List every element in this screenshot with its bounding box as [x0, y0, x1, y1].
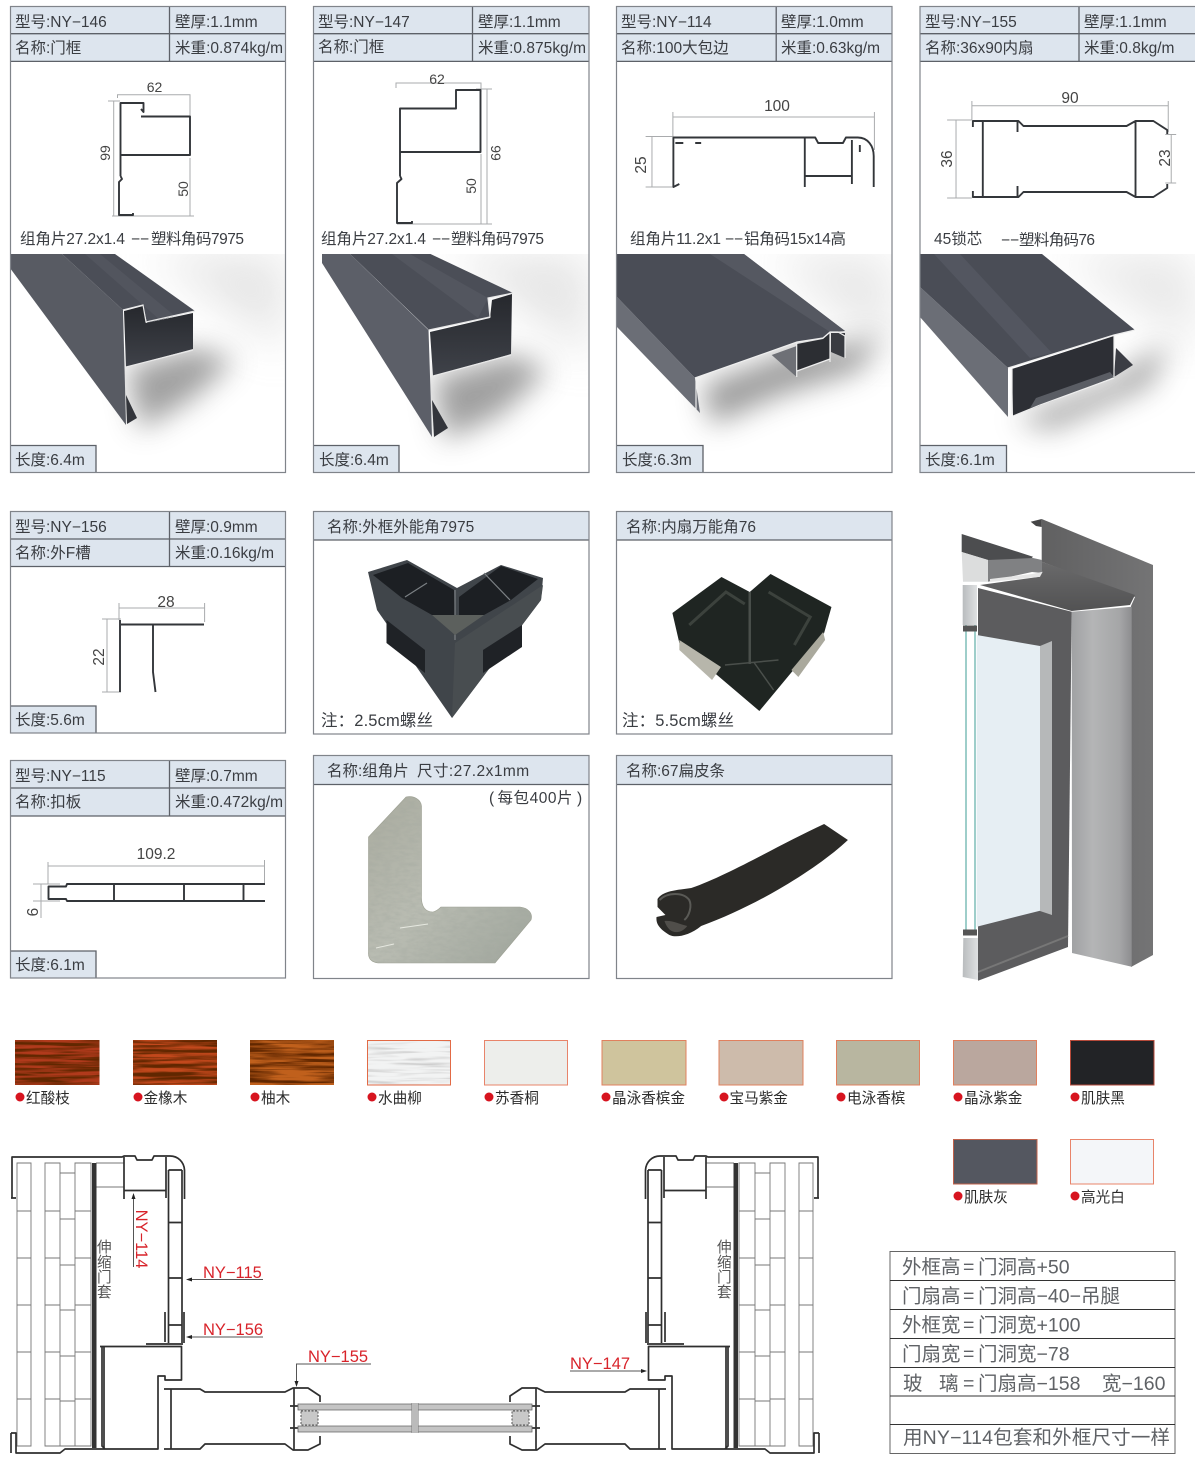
spec header NY-155: 米重:0.8kg/m [1084, 39, 1174, 57]
spec header NY-115 [10, 760, 286, 816]
panel border [314, 6, 589, 472]
photo NY-147 [322, 254, 589, 440]
assembly note NY-155 [934, 230, 1095, 249]
formula 外框宽: 门洞宽+100 [978, 1314, 1081, 1336]
photo: rubber strip [656, 824, 848, 936]
swatch 金橡木 [133, 1040, 217, 1107]
assembly note NY-155: 塑料角码76 [1019, 231, 1095, 249]
panel: 67扁皮条 [616, 756, 892, 978]
profile drawing NY-147: 99 [488, 145, 504, 161]
panel border [616, 6, 892, 472]
spec header NY-147: 型号:NY−147 [318, 13, 410, 31]
formula 门扇宽: = [963, 1344, 974, 1366]
formula 玻璃: 璃 [939, 1373, 959, 1395]
spec header NY-155: 壁厚:1.1mm [1084, 13, 1167, 31]
assembly note NY-114 [630, 230, 846, 248]
swatch 水曲柳: 水曲柳 [378, 1090, 422, 1107]
swatch 肌肤黑 [1070, 1040, 1154, 1107]
profile drawing NY-114: 25 [633, 156, 650, 174]
spec header NY-155: 型号:NY−155 [925, 13, 1017, 31]
formula 外框高: = [963, 1256, 974, 1278]
spec header NY-114: 型号:NY−114 [621, 13, 712, 31]
panel border [314, 512, 589, 734]
profile drawing NY-155: 90 [1061, 90, 1079, 107]
swatch 红酸枝 [15, 1040, 100, 1107]
panel border [10, 760, 286, 978]
formula 外框高: 门洞高+50 [978, 1256, 1070, 1278]
section highlight [990, 572, 1043, 582]
profile drawing NY-115 [23, 846, 265, 918]
swatch 苏香桐 [484, 1040, 568, 1107]
callout NY-114: NY−114 [132, 1210, 150, 1268]
spec header NY-114: 壁厚:1.0mm [781, 13, 864, 31]
label: 伸缩门套 right [717, 1239, 732, 1301]
panel: NY-155 [920, 6, 1195, 472]
top silver block [962, 552, 988, 582]
formula 外框宽: 外框宽 [902, 1314, 961, 1336]
photo: corner plate [365, 795, 535, 965]
assembly note NY-146 [20, 230, 244, 248]
photo: plastic outer corner [368, 560, 543, 718]
silver left block [963, 585, 977, 625]
top rail dark [962, 534, 1033, 560]
panel border [920, 6, 1195, 472]
header [314, 756, 589, 784]
spec header NY-114 [616, 6, 892, 62]
profile drawing NY-114 [633, 98, 874, 187]
swatch 肌肤灰: 肌肤灰 [964, 1189, 1008, 1206]
profile drawing NY-147 [396, 71, 504, 224]
profile drawing NY-115: 9 [23, 908, 40, 916]
packing note: ) [577, 790, 582, 807]
assembly note NY-155: 45锁芯 [934, 230, 982, 248]
profile drawing NY-147: 50 [463, 178, 479, 194]
spec header NY-115: 型号:NY−115 [15, 767, 106, 785]
header [616, 512, 892, 540]
panel: NY-147 [314, 6, 589, 472]
header: 名称:外框外能角7975 [327, 518, 474, 536]
spec header NY-155 [920, 6, 1195, 62]
swatch 柚木 [250, 1040, 334, 1107]
length tab NY-147 [314, 446, 399, 472]
spec header NY-146 [10, 6, 286, 62]
profile drawing NY-115: 109.2 [137, 846, 175, 863]
formula 门扇高: = [963, 1286, 974, 1308]
formula 玻璃: = [963, 1373, 974, 1395]
spec header NY-156: 型号:NY−156 [15, 518, 107, 536]
swatch 晶泳紫金: 晶泳紫金 [964, 1090, 1023, 1107]
formula 门扇高: 门洞高−40−吊腿 [978, 1286, 1120, 1308]
formula 玻璃: 宽−160 [1102, 1373, 1166, 1395]
swatch 高光白 [1070, 1140, 1154, 1206]
length tab NY-146 [10, 446, 96, 472]
assembly note NY-155: −− [1001, 232, 1019, 249]
swatch 金橡木: 金橡木 [144, 1090, 188, 1107]
length tab NY-114 [616, 446, 703, 472]
assembly note NY-147: 组角片27.2x1.4 [321, 230, 426, 248]
header: 名称:内扇万能角76 [626, 518, 756, 536]
panel: NY-146 [10, 6, 286, 472]
glazing spacers [963, 628, 977, 932]
assembly note NY-146: 塑料角码7975 [151, 230, 244, 248]
profile drawing NY-147: 62 [429, 71, 445, 87]
assembly note NY-114: 组角片11.2x1 [630, 230, 721, 248]
swatch 水曲柳 [368, 1040, 450, 1107]
panel: 内扇万能角76 [616, 512, 892, 734]
swatch 晶泳香槟金: 晶泳香槟金 [612, 1090, 685, 1107]
label: 伸缩门套 right: 门 [717, 1269, 732, 1286]
label: 伸缩门套 left: 门 [97, 1269, 112, 1286]
callout NY-115: NY−115 [203, 1264, 262, 1282]
panel: NY-156 [10, 512, 286, 733]
spec header NY-147: 米重:0.875kg/m [478, 39, 586, 57]
bottom silver block [963, 938, 978, 980]
profile drawing NY-156: 28 [157, 594, 175, 611]
label: 伸缩门套 left: 伸 [97, 1239, 112, 1256]
profile drawing NY-156: 22 [91, 648, 108, 666]
spec header NY-146: 米重:0.874kg/m [175, 39, 283, 57]
spec header NY-147: 壁厚:1.1mm [478, 13, 561, 31]
callout NY-155: NY−155 [308, 1348, 368, 1366]
soffit [980, 562, 1135, 611]
spec header NY-115: 米重:0.472kg/m [175, 793, 283, 811]
profile drawing NY-146: 62 [147, 79, 162, 95]
formula 外框宽: = [963, 1314, 974, 1336]
label: 伸缩门套 right: 套 [717, 1284, 732, 1301]
swatch 电泳香槟: 电泳香槟 [847, 1090, 906, 1107]
length tab NY-155 [920, 446, 1006, 472]
assembly note NY-114: 铝角码15x14高 [744, 230, 846, 248]
length tab NY-115: 长度:6.1m [15, 956, 85, 974]
formula 玻璃: 门扇高−158 [978, 1373, 1080, 1395]
inner reveal [1040, 641, 1052, 915]
callout NY-156: NY−156 [203, 1321, 263, 1339]
jamb reveal [1072, 607, 1132, 967]
glass panes [966, 625, 975, 935]
formula note: 用NY−114包套和外框尺寸一样 [903, 1427, 1170, 1449]
callout NY-147: NY−147 [570, 1355, 630, 1373]
profile drawing NY-155: 23 [1157, 149, 1174, 167]
header: 名称:67扁皮条 [626, 762, 725, 780]
photo NY-146 [10, 254, 285, 430]
length tab NY-146: 长度:6.4m [15, 451, 85, 469]
packing note: 每包400片 [498, 789, 572, 807]
spec header NY-156 [10, 512, 286, 566]
channel [988, 558, 1042, 582]
header: 尺寸:27.2x1mm [417, 762, 530, 780]
label: 伸缩门套 right: 缩 [717, 1254, 732, 1271]
door leaf frame [978, 588, 1072, 981]
panel border [616, 756, 892, 978]
cross-section left half [11, 1156, 416, 1453]
header: 名称:组角片 [327, 763, 409, 780]
swatch 晶泳紫金 [954, 1040, 1036, 1107]
header [314, 512, 589, 540]
spec header NY-146: 壁厚:1.1mm [175, 13, 258, 31]
swatch 宝马紫金 [719, 1040, 803, 1107]
spec header NY-147: 名称:门框 [318, 38, 384, 56]
spec header NY-114: 米重:0.63kg/m [781, 39, 880, 57]
formula 门扇宽: 门洞宽−78 [978, 1344, 1070, 1366]
length tab NY-156: 长度:5.6m [15, 711, 85, 729]
profile drawing NY-146: 50 [175, 181, 191, 197]
callout NY-155 [294, 1348, 371, 1387]
window frame render [962, 519, 1153, 981]
photo NY-155 [920, 254, 1195, 430]
swatch 晶泳香槟金 [602, 1040, 686, 1107]
assembly note NY-147 [321, 230, 544, 248]
spec header NY-115: 壁厚:0.7mm [175, 767, 258, 785]
assembly note NY-147: 塑料角码7975 [451, 230, 544, 248]
swatch 红酸枝: 红酸枝 [26, 1090, 70, 1107]
outer wall [1042, 519, 1153, 967]
label: 伸缩门套 left: 套 [97, 1284, 112, 1301]
panel border [10, 6, 286, 472]
profile drawing NY-114: 100 [764, 98, 790, 115]
cross-section right half [414, 1156, 819, 1453]
spec header NY-156: 壁厚:0.9mm [175, 518, 258, 536]
formula 门扇高: 门扇高 [902, 1286, 961, 1308]
note: 注：2.5cm螺丝 [321, 711, 433, 730]
length tab NY-156 [10, 706, 96, 733]
formula 外框高: 外框高 [902, 1256, 961, 1278]
length tab NY-114: 长度:6.3m [622, 451, 692, 469]
packing note: ( [489, 790, 495, 807]
photo NY-114 [617, 254, 892, 425]
label: 伸缩门套 left [97, 1239, 112, 1301]
assembly note NY-147: −− [432, 231, 450, 248]
formula 门扇宽: 门扇宽 [902, 1344, 961, 1366]
panel border [616, 512, 892, 734]
colour swatches [15, 1040, 1154, 1206]
swatch 电泳香槟 [836, 1040, 920, 1107]
spec header NY-156: 名称:外F槽 [15, 544, 91, 562]
profile drawing NY-155 [939, 90, 1176, 198]
frame lower highlight [978, 936, 1068, 972]
swatch 高光白: 高光白 [1081, 1189, 1125, 1206]
swatch 肌肤灰 [954, 1140, 1037, 1206]
length tab NY-155: 长度:6.1m [925, 451, 995, 469]
photo: plastic inner corner [672, 574, 831, 711]
panel: 组角片 [314, 756, 589, 978]
length tab NY-115 [10, 951, 96, 978]
spec header NY-147 [314, 6, 589, 62]
label: 伸缩门套 right: 伸 [717, 1239, 732, 1256]
glass [977, 635, 1040, 927]
assembly note NY-114: −− [725, 231, 743, 248]
panel border [10, 512, 286, 733]
header [616, 756, 892, 784]
panel: 外框外能角7975 [314, 512, 589, 734]
panel: NY-115 [10, 760, 286, 978]
spec header NY-146: 型号:NY−146 [15, 13, 107, 31]
swatch 柚木: 柚木 [261, 1090, 291, 1107]
formula 玻璃: 玻 [903, 1373, 923, 1395]
note: 注：5.5cm螺丝 [622, 711, 734, 730]
profile drawing NY-155: 36 [939, 150, 956, 168]
panel: NY-114 [616, 6, 892, 472]
assembly note NY-146: −− [131, 231, 149, 248]
swatch 肌肤黑: 肌肤黑 [1081, 1090, 1125, 1107]
swatch 苏香桐: 苏香桐 [495, 1090, 539, 1107]
assembly note NY-146: 组角片27.2x1.4 [20, 230, 125, 248]
spec header NY-115: 名称:扣板 [15, 793, 81, 811]
swatch 宝马紫金: 宝马紫金 [730, 1090, 788, 1107]
label: 伸缩门套 left: 缩 [97, 1254, 112, 1271]
profile drawing NY-156 [91, 594, 205, 692]
spec header NY-146: 名称:门框 [15, 39, 81, 57]
panel border [314, 756, 589, 978]
profile drawing NY-146: 99 [97, 145, 113, 161]
spec header NY-155: 名称:36x90内扇 [925, 39, 1034, 57]
spec header NY-114: 名称:100大包边 [621, 39, 729, 57]
profile drawing NY-146 [97, 79, 194, 216]
length tab NY-147: 长度:6.4m [319, 451, 389, 469]
wall lip [1031, 519, 1042, 527]
spec header NY-156: 米重:0.16kg/m [175, 544, 274, 562]
formula table [890, 1252, 1175, 1454]
